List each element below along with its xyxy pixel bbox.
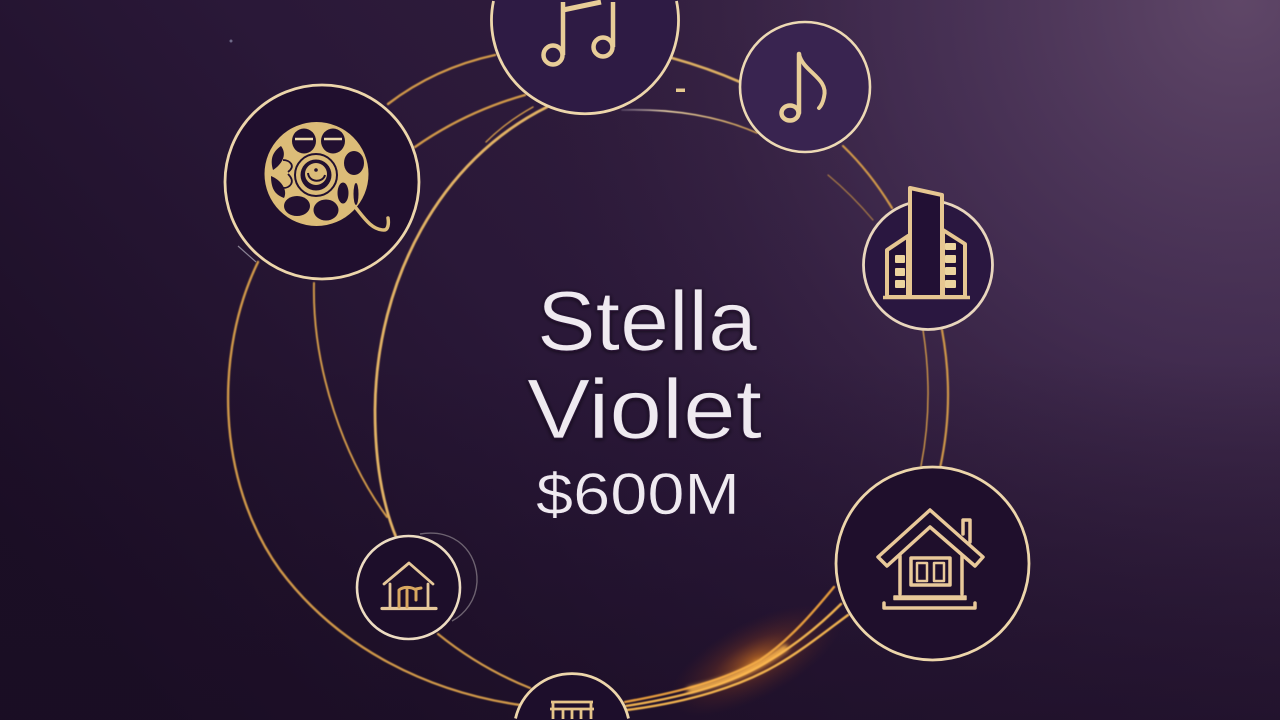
icon: buildings [883,188,970,298]
node: single music note [740,22,870,152]
icon: film reel [264,122,388,230]
icon: eighth note [782,54,825,120]
small stray marks [230,40,685,262]
icon: small house [382,563,436,608]
node: beamed music notes [492,0,678,114]
center title: Stella Violet [527,274,762,456]
node: bottom building, cropped by canvas [515,673,629,720]
center title: Stella Violet: Stella [537,274,757,368]
icon: house [878,510,983,608]
thin partial circle behind small house [420,533,477,621]
node: office buildings [864,188,992,330]
icon: columned building [550,702,594,719]
center title: Stella Violet: Violet [527,362,762,456]
center value: $600M: $600M [536,462,740,527]
swoosh glow [653,582,857,720]
node: small house [357,536,460,639]
gold orbit rings [228,55,948,710]
node: large house [836,467,1029,660]
node: film reel [225,85,419,279]
icon: beamed notes [544,2,613,64]
bright swoosh highlight [690,648,785,690]
